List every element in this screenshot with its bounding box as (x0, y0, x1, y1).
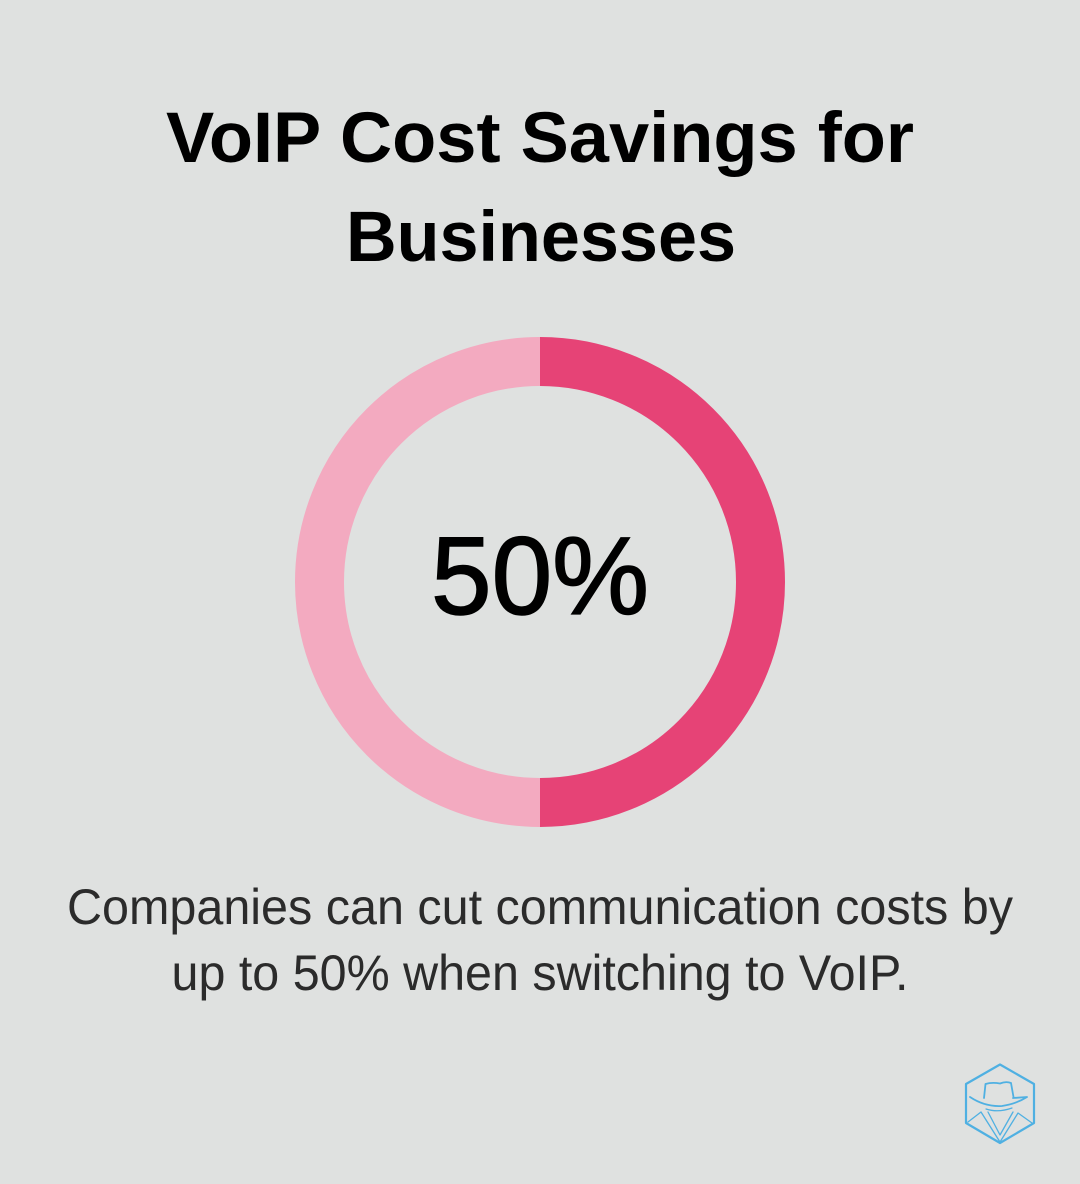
icon: hexagon logo with hat (966, 1064, 1034, 1143)
description text: up to 50% when switching to VoIP. (172, 945, 908, 1001)
title: VoIP Cost Savings for (166, 99, 914, 178)
title: Businesses (346, 198, 736, 277)
donut remainder segment (320, 362, 540, 802)
title (166, 99, 914, 277)
description text (67, 879, 1013, 1001)
donut value: 50% (431, 515, 649, 638)
donut chart: 50% (320, 362, 760, 802)
donut highlighted segment (540, 362, 760, 802)
description text: Companies can cut communication costs by (67, 879, 1013, 935)
